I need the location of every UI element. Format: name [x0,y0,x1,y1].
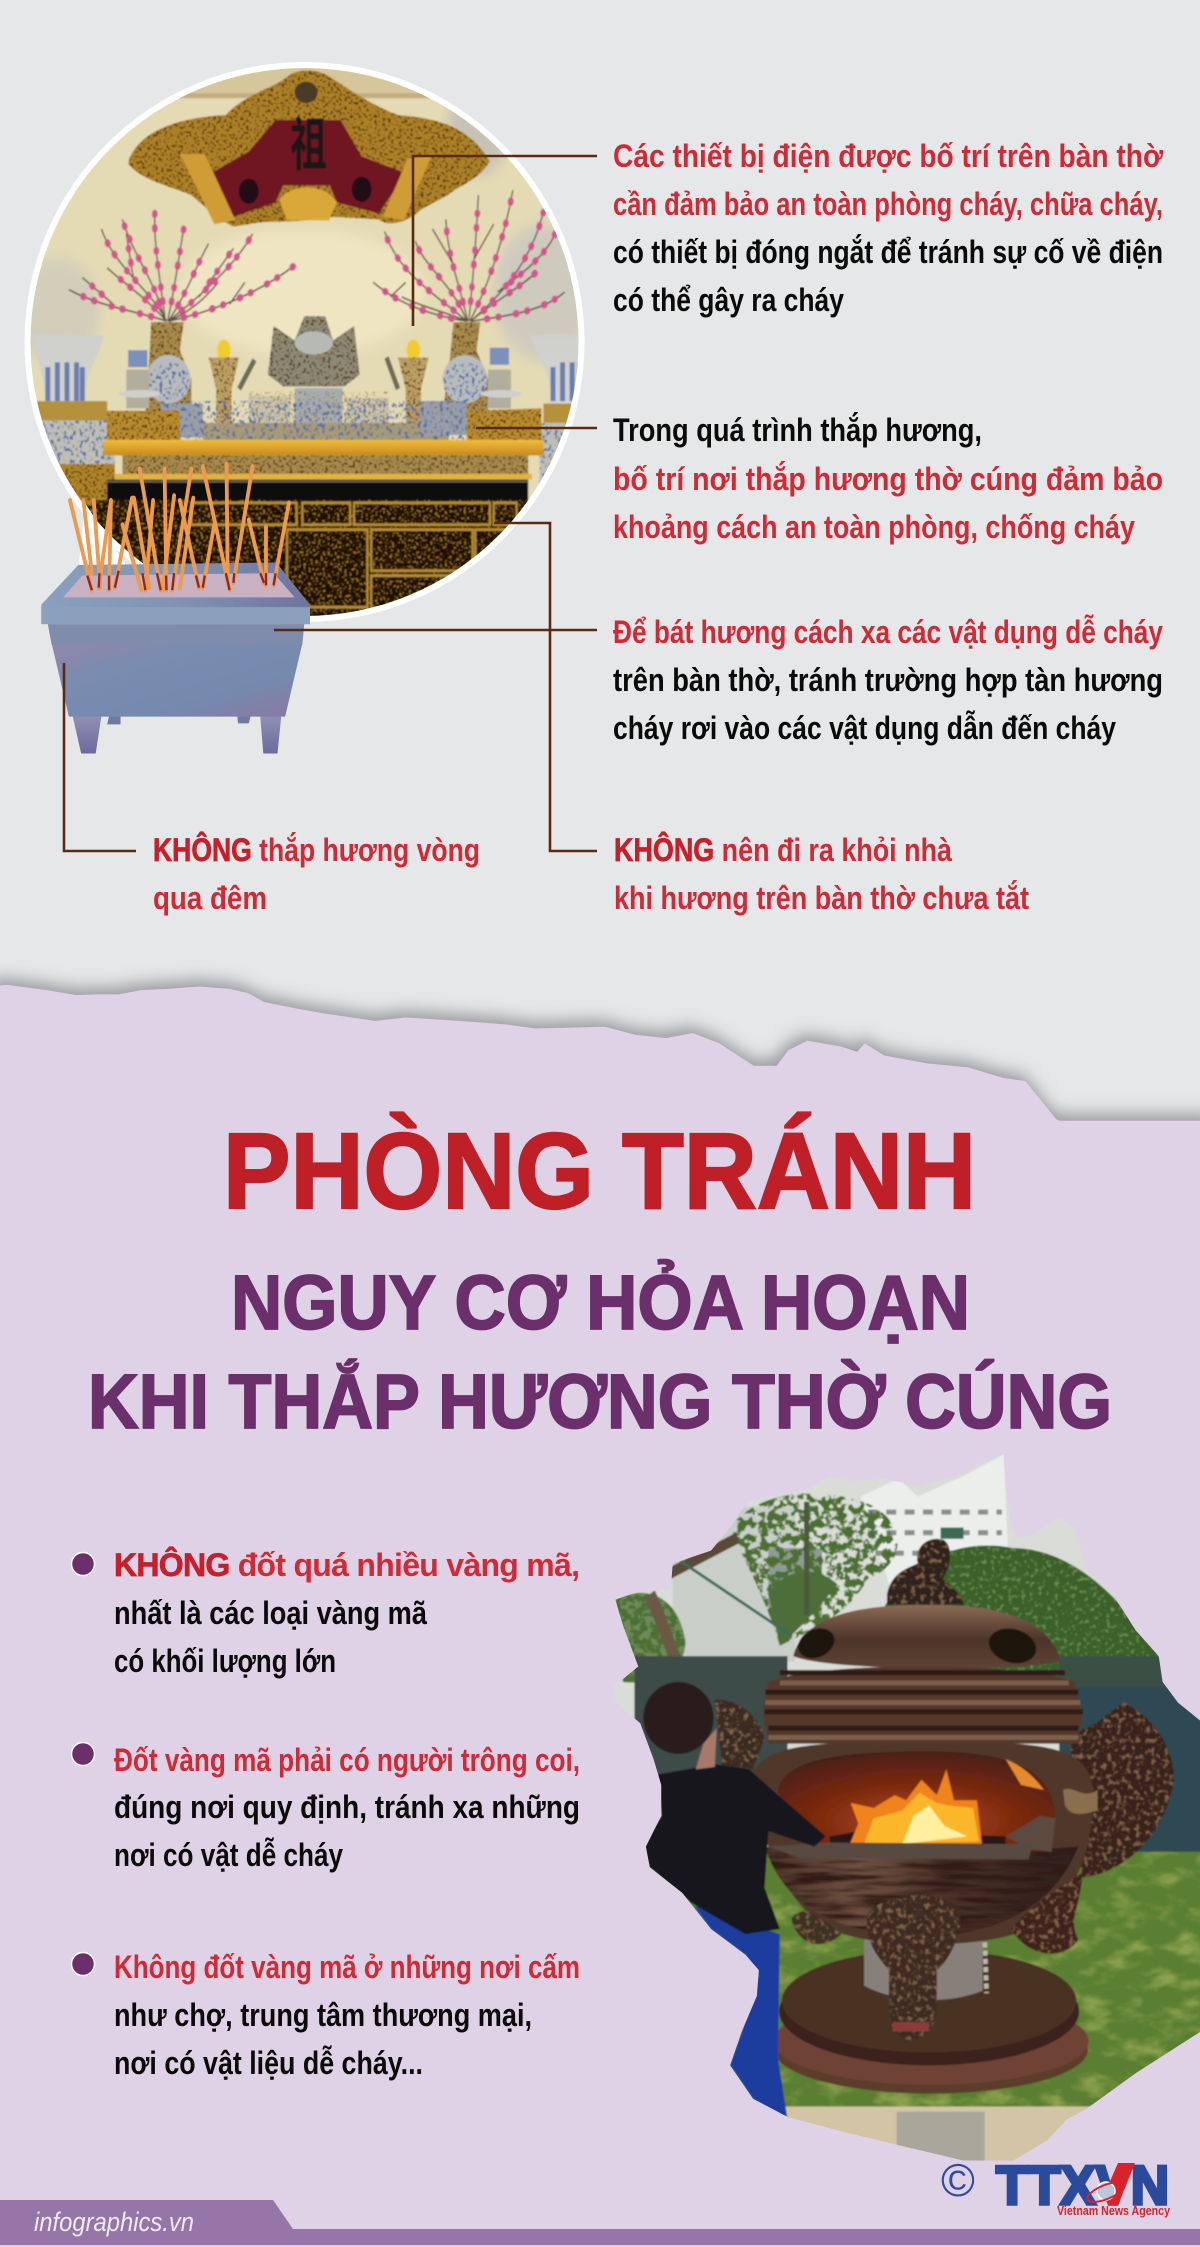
callout lines [413,156,597,851]
callout line: burner to overnight note [64,663,136,851]
list item 2: Đốt vàng mã phải có người trông coi, [114,1742,580,1778]
list item 3: Không đốt vàng mã ở những nơi cấm [114,1949,580,1985]
text block: do not leave home [614,832,1029,916]
photo: ancestral altar in circle: 祖 [290,114,327,178]
list item 3: nơi có vật liệu dễ cháy... [114,2045,423,2081]
photo: ancestral altar in circle [24,62,584,622]
title: NGUY CƠ HỎA HOẠN [231,1259,970,1346]
footer bar [0,2200,1200,2245]
text block: incense bowl distance [613,614,1163,746]
icon: incense burner with incense sticks [41,464,310,753]
text block: do not leave home: KHÔNG nên đi ra khỏi nhà [614,832,952,868]
title: PHÒNG TRÁNH [223,1110,976,1231]
list item 1: nhất là các loại vàng mã [114,1595,427,1631]
photo: woman burning votive paper in bronze censer [600,1440,1200,2186]
text block: incense placement: Trong quá trình thắp hương, [613,412,982,448]
text block: do not leave home: khi hương trên bàn thờ chưa tắt [614,880,1029,916]
logo: TTXVN Vietnam News Agency: Vietnam News Agency [1057,2204,1170,2218]
footer text: infographics.vn: infographics.vn [34,2207,194,2237]
title: KHI THẮP HƯƠNG THỜ CÚNG [88,1358,1112,1445]
list item 1: KHÔNG đốt quá nhiều vàng mã, [114,1547,580,1583]
list item 1 [72,1547,580,1679]
list item 3: như chợ, trung tâm thương mại, [114,1997,532,2033]
text block: no coil incense overnight [153,832,480,916]
text block: no coil incense overnight: qua đêm [153,880,267,916]
list item 3 [72,1949,580,2081]
list item 1: có khối lượng lớn [114,1643,336,1679]
text block: incense placement [613,412,1163,545]
text block: electrical devices [613,138,1163,318]
list item 2: đúng nơi quy định, tránh xa những [114,1789,580,1825]
title [88,1110,1112,1445]
text block: no coil incense overnight: KHÔNG thắp hương vòng [153,832,480,868]
callout line: burner to text [274,629,597,631]
text block: electrical devices: có thể gây ra cháy [613,282,844,318]
list item 2: nơi có vật dễ cháy [114,1837,343,1873]
list item 2 [72,1742,580,1873]
logo: TTXVN Vietnam News Agency: © [941,2154,975,2206]
logo: TTXVN Vietnam News Agency: TTXVN [996,2154,1169,2216]
panel: torn purple paper [0,985,1200,2247]
